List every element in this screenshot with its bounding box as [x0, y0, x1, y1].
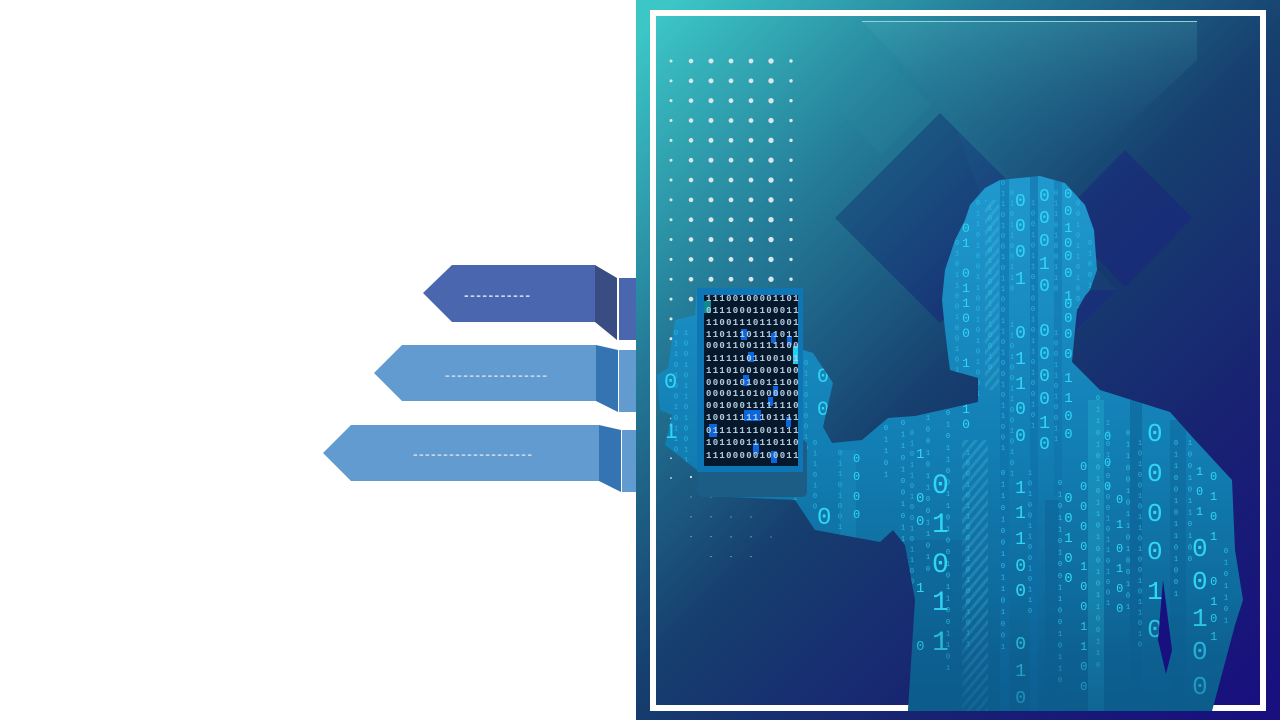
decorative diamonds [835, 21, 1197, 366]
small digit columns: 01001101 [1086, 240, 1094, 325]
large digit columns: 0 [817, 366, 828, 389]
large digit columns: 00100010000110000100 [1064, 187, 1072, 587]
small digit columns: 01101 [882, 425, 890, 483]
small digit columns: 01101001011001101001011001 [999, 180, 1007, 456]
screen digits: 11100000100011 [706, 451, 800, 461]
white frame [653, 13, 1263, 708]
arrow label: first tier: ----------- [464, 287, 530, 303]
small digit columns: 0110100110010101001 [974, 200, 982, 401]
small digit columns: 01100101101001 [1172, 440, 1180, 602]
large digit columns: 0 [817, 505, 830, 532]
large digit columns: 01010101 [1210, 470, 1217, 644]
large digit columns: 101 [1196, 465, 1203, 519]
large digit columns [664, 187, 1217, 709]
small digit columns: 1001011001101001011 [964, 450, 972, 651]
small digit columns: 100101101001 [1074, 190, 1082, 317]
small digit columns: 0101101 [1222, 548, 1230, 629]
small digit columns: 10100101101001011010 [1136, 440, 1144, 652]
large digit columns: 000010 [1147, 419, 1162, 645]
arrow: first tier [423, 265, 636, 340]
small digit columns: 10100110010110 [1026, 470, 1034, 618]
screen digits: 10011111101111 [706, 413, 800, 423]
small digit columns: 010110100101100110 [908, 430, 916, 621]
small digit columns: 011010010110100101100110 [1094, 395, 1102, 673]
small digit columns: 0110100101101001 [999, 470, 1007, 656]
large digit columns: 10010 [916, 447, 924, 655]
panel: gradient image background [636, 0, 1280, 720]
large digit columns: 010100 [1116, 493, 1123, 616]
screen digits: 11101001000100 [706, 366, 800, 376]
screen digits: 11111101100101 [706, 354, 800, 364]
screen digits: 00001010011100 [706, 378, 800, 388]
screen digits: 00001101000000 [706, 389, 800, 399]
large digit columns: 0 [664, 370, 676, 395]
small digit columns: 0110100101100100110 [672, 330, 680, 531]
small digit columns: 1001011001110010 [986, 205, 994, 375]
silhouette: person made of binary digits [650, 170, 1250, 715]
arrow: second tier [374, 345, 636, 412]
dot grid [671, 61, 791, 560]
small digit columns: 0110100110 [1052, 190, 1060, 296]
screen digits: 01110001100011 [706, 306, 800, 316]
large digit columns: 0 [817, 399, 828, 422]
large digit columns: 1 [664, 420, 677, 445]
large digit columns: 000 [1104, 430, 1111, 494]
small digit columns: 100110100101101001 [1104, 420, 1112, 611]
screen digits: 00011001111100 [706, 341, 800, 351]
tablet shadow [697, 440, 807, 497]
large digit columns: 0101100110 [962, 221, 970, 432]
bottom fade over digits [908, 612, 1228, 711]
large digit columns: 00010000010 [1039, 187, 1049, 455]
small digit columns: 0110010110100101 [1124, 430, 1132, 616]
arrow label: second tier: ----------------- [445, 367, 547, 383]
screen highlights [704, 301, 798, 463]
large digit columns: 00100 [1192, 534, 1207, 702]
screen digits: 10110011110110 [706, 438, 800, 448]
screen digits: 01111111001111 [706, 426, 800, 436]
small digit columns: 10010110100 [1186, 440, 1194, 568]
small digit columns: 0110100 [811, 440, 819, 514]
small digit columns: 101 [791, 495, 799, 527]
large digit columns: 01011 [932, 471, 948, 659]
small digit columns: 01101001101 [836, 450, 844, 567]
small digit columns: 110100110010101 [1008, 322, 1016, 481]
screen digits: 00100011111110 [706, 401, 800, 411]
small digit columns: 01011001101001011001101 [944, 410, 952, 677]
small digit columns: 010110100110010110 [1056, 480, 1064, 689]
large digit columns: 000001001100 [1080, 460, 1087, 694]
small digit columns [672, 180, 1230, 689]
screen digits: 11011101111011 [706, 330, 800, 340]
tie gap in silhouette [1158, 580, 1172, 674]
small digit columns: 1001011010010110100101 [1029, 200, 1037, 433]
small digit columns: 0101100110 [1008, 190, 1016, 296]
arrow label: third tier: -------------------- [413, 446, 532, 462]
small digit columns: 10011010011 [1052, 330, 1060, 447]
arrow: third tier [323, 425, 636, 492]
small digit columns: 10010110011010 [924, 415, 932, 577]
large digit columns: 0000 [853, 452, 860, 522]
large digit columns: 00010110011100010 [1015, 192, 1025, 709]
vertical light and dark streaks [840, 176, 1186, 711]
small digit columns: 1001011010011010 [682, 330, 690, 500]
small digit columns: 0101100100101101 [953, 240, 961, 410]
screen digits: 11100100001101 [706, 294, 800, 304]
tablet: binary screen [697, 288, 803, 472]
screen digits [706, 294, 800, 461]
small digit columns: 011010010110100110 [899, 420, 907, 629]
small digit columns: 011010010 [802, 360, 810, 455]
screen digits: 11001110111001 [706, 318, 800, 328]
